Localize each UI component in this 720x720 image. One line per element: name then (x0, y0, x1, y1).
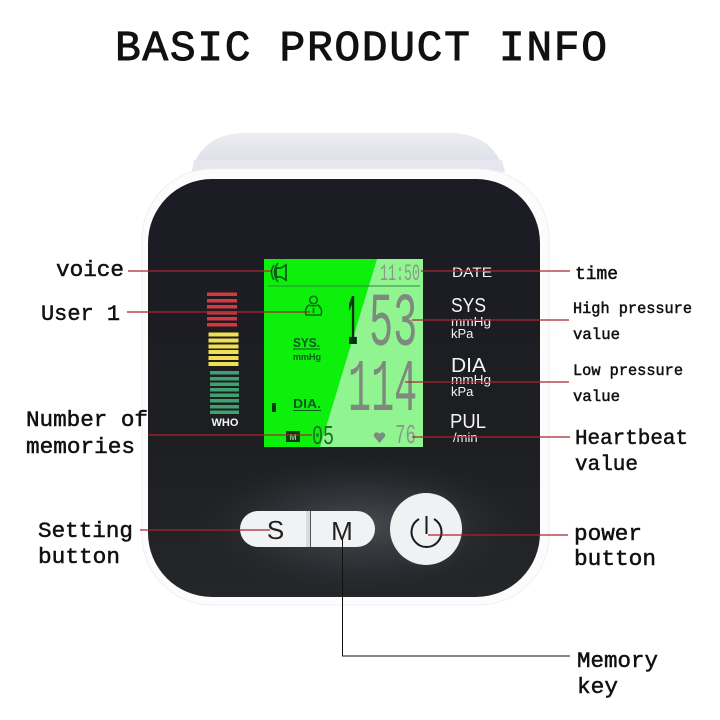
unit labels: mmHg (451, 314, 491, 329)
unit labels: DIA (451, 355, 487, 377)
mmHg label: mmHg (293, 352, 321, 362)
memory M badge (286, 431, 300, 442)
red bars (207, 292, 237, 326)
systolic reading 153: 1 (348, 281, 357, 359)
S and M buttons: S (267, 515, 284, 545)
icon: speaker (272, 263, 286, 282)
unit labels: SYS (451, 295, 486, 317)
unit labels: DATE (452, 264, 492, 280)
callout: heartbeat value: Heartbeat (575, 428, 688, 451)
systolic reading 153: 53 (369, 283, 417, 369)
callout: low pressure value (405, 362, 683, 406)
cuff strap (192, 133, 504, 172)
callout: power button (428, 522, 656, 572)
callout: heartbeat value: value (575, 454, 638, 477)
memory battery mark (272, 403, 276, 412)
unit labels: kPa (451, 326, 474, 341)
callout: power button: power (574, 522, 642, 547)
callout: memory key: Memory (577, 649, 658, 674)
systolic reading 153 (348, 281, 417, 369)
WHO label: WHO (212, 417, 239, 429)
icon: user 1 (305, 296, 322, 315)
black face panel (148, 179, 540, 597)
S and M buttons (240, 511, 375, 547)
callout: voice: voice (56, 258, 124, 283)
green bars (210, 371, 239, 414)
callout: user 1: User 1 (41, 302, 120, 327)
callout: number of memories: Number of (26, 408, 148, 433)
unit labels: mmHg (451, 372, 491, 387)
yellow bars (208, 332, 238, 366)
title: BASIC PRODUCT INFO (115, 24, 607, 73)
power button (382, 485, 470, 573)
WHO level bars (207, 292, 239, 429)
unit labels: kPa (451, 384, 474, 399)
DIA. label: DIA. (293, 397, 321, 411)
callout: power button: button (574, 547, 656, 572)
white body (142, 169, 549, 605)
SYS. label: SYS. (293, 336, 320, 350)
callout: number of memories (26, 408, 312, 460)
diastolic reading 114: 114 (348, 349, 417, 433)
blood pressure monitor device (142, 133, 549, 605)
memory M badge: M (289, 432, 297, 442)
callout: high pressure value: value (573, 326, 620, 344)
unit labels: PUL (450, 411, 486, 433)
S and M buttons: M (331, 516, 353, 546)
callout: memory key: key (577, 675, 618, 700)
callout: high pressure value (412, 300, 692, 344)
callout: heartbeat value (412, 428, 688, 477)
callout: high pressure value: High pressure (573, 300, 692, 318)
callout: low pressure value: Low pressure (573, 362, 683, 380)
unit labels: /min (453, 430, 478, 445)
callout: number of memories: memories (26, 435, 135, 460)
pulse reading 76: 76 (395, 422, 416, 452)
callout: setting button: Setting (38, 519, 133, 544)
callout: low pressure value: value (573, 388, 620, 406)
callout: time: time (575, 265, 618, 285)
time digits: 11:50 (380, 261, 420, 287)
LCD screen (264, 259, 423, 453)
callout: setting button: button (38, 545, 120, 570)
callout: setting button (38, 519, 270, 570)
icon: heart (374, 432, 385, 443)
unit labels (450, 264, 492, 445)
callout: memory key (342, 540, 658, 700)
memory count 05: 05 (312, 423, 334, 453)
